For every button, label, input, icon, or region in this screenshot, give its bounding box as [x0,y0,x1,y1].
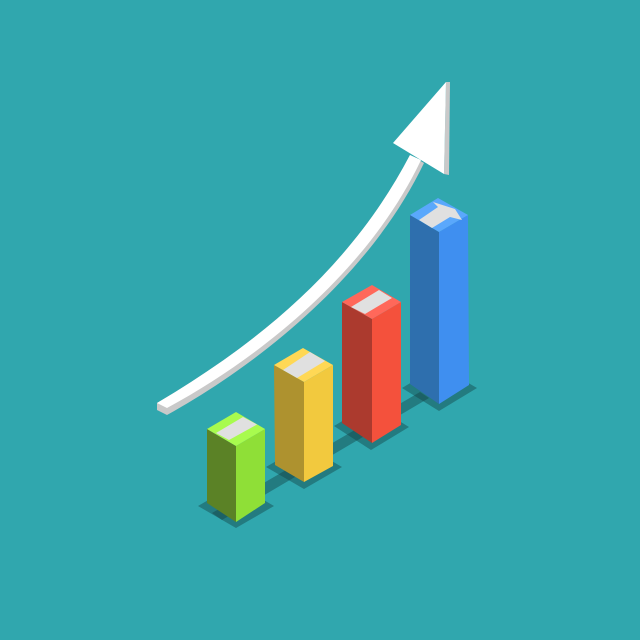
bar: blue [410,198,469,404]
arrow head [393,82,446,174]
bar: red [342,285,401,443]
arrow [157,82,450,415]
arrow shaft top [157,155,421,408]
bar: green [207,412,265,522]
arrow shaft side [157,155,424,415]
arrow head side [444,82,450,175]
bar: yellow [274,348,333,482]
ground shadows [198,366,477,528]
